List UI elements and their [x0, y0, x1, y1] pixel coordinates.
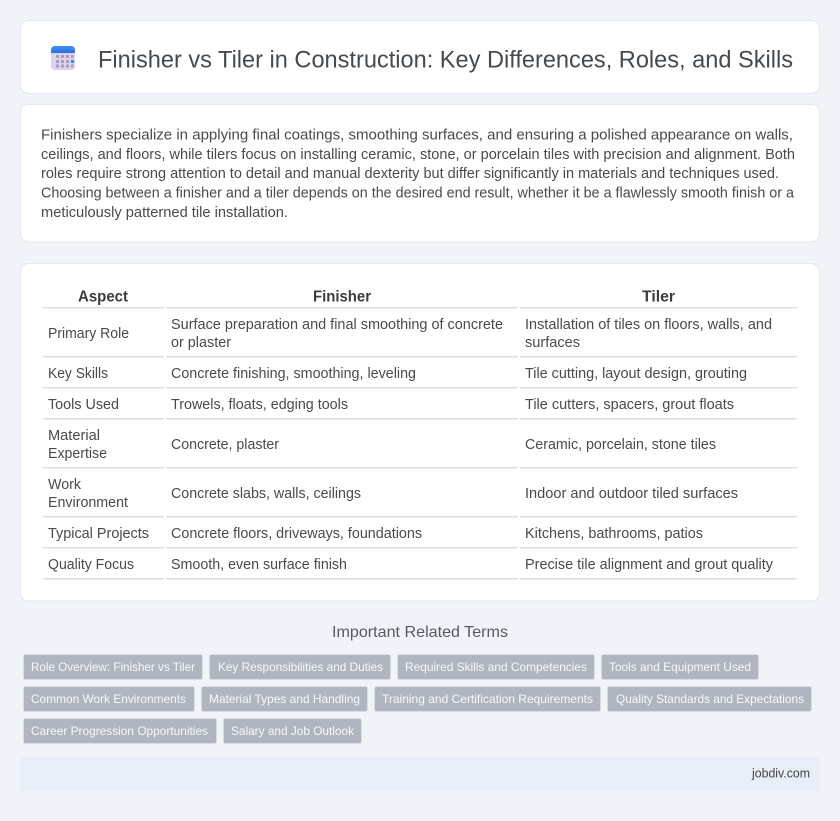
row: tools used: Tile cutters, spacers, grout floats	[525, 397, 734, 413]
row: tools used: Tools Used	[48, 397, 119, 413]
text block: summary paragraph: Finishers specialize in applying final coatings, smoothing surfaces, and ensuring a polished appearance on walls,	[41, 127, 793, 143]
row: material expertise: Material	[48, 428, 100, 444]
text block: summary paragraph: meticulously patterned tile installation.	[41, 205, 288, 221]
tag	[374, 686, 600, 712]
table header	[78, 289, 675, 306]
tag	[602, 654, 758, 680]
row: material expertise	[48, 428, 716, 462]
row: primary role: surfaces	[525, 335, 580, 351]
panel: related term tags	[24, 654, 812, 744]
panel: comparison table	[20, 264, 820, 601]
row: work environment	[48, 477, 738, 511]
tag	[608, 686, 812, 712]
tag	[210, 654, 390, 680]
row: primary role: Installation of tiles on floors, walls, and	[525, 317, 772, 333]
row: tools used	[48, 397, 734, 413]
row: material expertise: Ceramic, porcelain, stone tiles	[525, 437, 716, 453]
row: typical projects: Typical Projects	[48, 526, 149, 542]
tag	[224, 718, 362, 744]
row: typical projects: Concrete floors, driveways, foundations	[171, 526, 422, 542]
tag	[398, 654, 594, 680]
tag: Material Types and Handling	[209, 692, 360, 706]
tag: Career Progression Opportunities	[31, 724, 208, 738]
row: typical projects: Kitchens, bathrooms, patios	[525, 526, 703, 542]
footer	[20, 757, 820, 791]
row: material expertise: Concrete, plaster	[171, 437, 279, 453]
title: Finisher vs Tiler in Construction: Key Differences, Roles, and Skills	[98, 46, 793, 74]
tag	[24, 686, 194, 712]
row: primary role: Primary Role	[48, 326, 129, 342]
row: material expertise: Expertise	[48, 446, 107, 462]
footer source text: jobdiv.com	[751, 766, 810, 780]
tag	[202, 686, 368, 712]
text block: summary paragraph: roles require strong attention to detail and manual dexterity but differ significantly in materials and techniques used.	[41, 166, 779, 182]
text block: summary paragraph: ceilings, and floors, while tilers focus on installing ceramic, stone, or porcelain tiles with precision and alignment. Both	[41, 147, 795, 163]
tag: Key Responsibilities and Duties	[218, 660, 383, 674]
row: key skills: Key Skills	[48, 366, 108, 382]
row: work environment: Work	[48, 477, 82, 493]
table header: Aspect	[78, 289, 129, 306]
tag: Salary and Job Outlook	[231, 724, 355, 738]
text block: summary paragraph: Choosing between a finisher and a tiler depends on the desired end result, whether it be a flawlessly smooth finish or a	[41, 186, 794, 202]
tag	[24, 718, 216, 744]
row: quality focus: Precise tile alignment and grout quality	[525, 557, 774, 573]
row: primary role: Surface preparation and final smoothing of concrete	[171, 317, 503, 333]
row: primary role	[48, 317, 772, 351]
row: key skills: Concrete finishing, smoothing, leveling	[171, 366, 416, 382]
row: work environment: Indoor and outdoor tiled surfaces	[525, 486, 738, 502]
row: primary role: or plaster	[171, 335, 231, 351]
text block: summary paragraph	[41, 127, 795, 221]
row: work environment: Concrete slabs, walls, ceilings	[171, 486, 361, 502]
tag: Common Work Environments	[31, 692, 186, 706]
row: quality focus	[48, 557, 774, 573]
icon: calendar	[51, 46, 75, 70]
panel: introduction	[20, 104, 820, 242]
tag: Role Overview: Finisher vs Tiler	[31, 660, 195, 674]
heading: related terms: Important Related Terms	[332, 624, 508, 641]
tag: Quality Standards and Expectations	[616, 692, 804, 706]
tag: Required Skills and Competencies	[405, 660, 587, 674]
row: typical projects	[48, 526, 703, 542]
tag: Tools and Equipment Used	[609, 660, 751, 674]
tag: Training and Certification Requirements	[382, 692, 593, 706]
row: tools used: Trowels, floats, edging tools	[171, 397, 348, 413]
row: work environment: Environment	[48, 495, 128, 511]
panel: header	[20, 20, 820, 94]
table header: Tiler	[642, 289, 675, 306]
row: quality focus: Smooth, even surface finish	[171, 557, 347, 573]
tag	[24, 654, 202, 680]
row: key skills: Tile cutting, layout design, grouting	[525, 366, 747, 382]
row: quality focus: Quality Focus	[48, 557, 134, 573]
table header: Finisher	[313, 289, 371, 306]
row: key skills	[48, 366, 747, 382]
